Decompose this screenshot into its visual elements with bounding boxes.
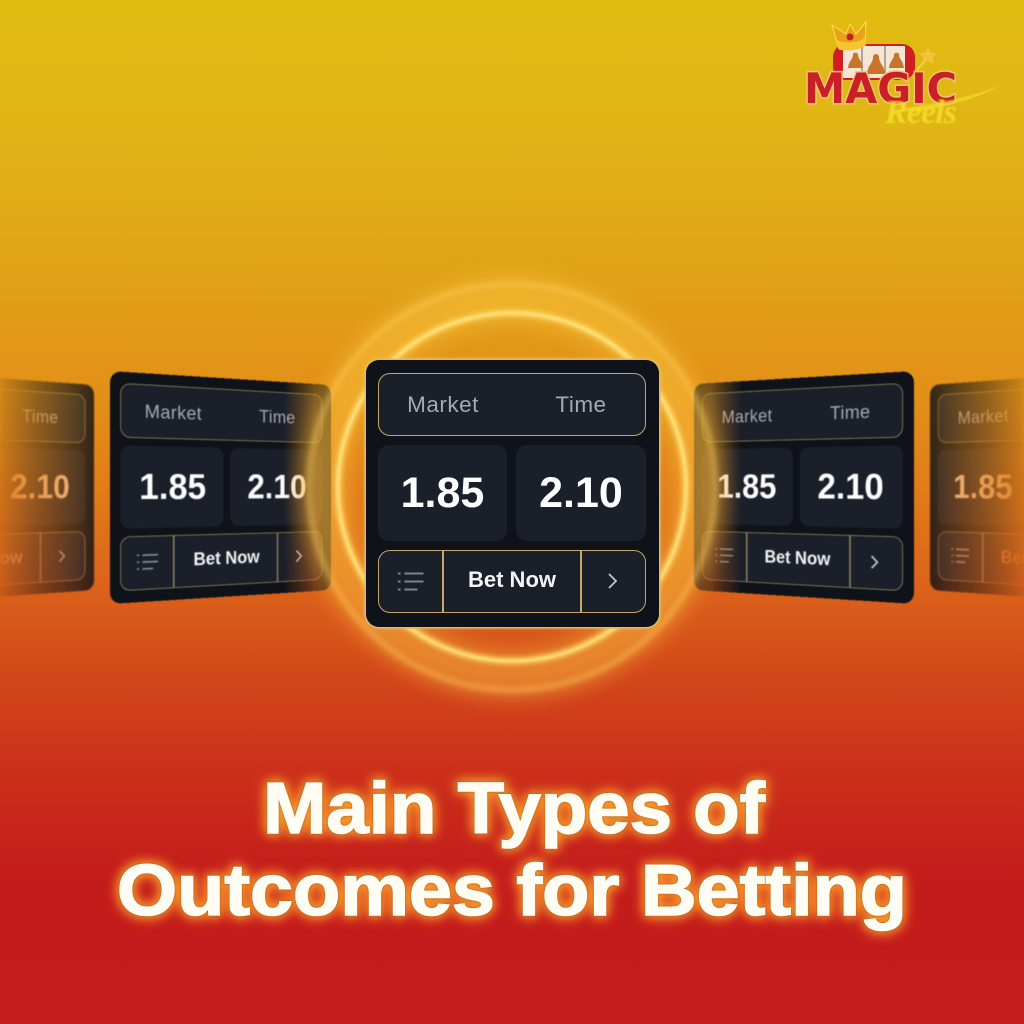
left card: Time: [259, 406, 295, 427]
right card: Time: [830, 401, 871, 424]
title: [108, 769, 914, 942]
far right card: Market: [958, 405, 1009, 428]
odds 2.10: [516, 445, 646, 541]
right card: Market: [722, 405, 772, 427]
icon: list: [398, 572, 424, 590]
icon: star wand: [915, 47, 937, 72]
odds 1.85: 1.85: [401, 469, 484, 517]
action row: [378, 550, 646, 613]
title: Outcomes for Betting: [117, 851, 907, 931]
left card: [109, 370, 332, 604]
right card: 2.10: [817, 466, 884, 508]
far left card: 2.10: [10, 468, 70, 507]
far right card: [929, 378, 1024, 597]
icon: chevron: [608, 573, 618, 589]
bet now label: Bet Now: [468, 567, 556, 592]
icon: slot reel: [833, 44, 915, 80]
far right card: 1.85: [953, 468, 1013, 507]
center card: Market: [407, 392, 479, 417]
logo: [804, 20, 996, 131]
far left card: Time: [22, 406, 58, 427]
right card: Bet Now: [765, 546, 830, 569]
center card: Time: [555, 392, 607, 417]
logo script: [884, 85, 1000, 131]
left card: Market: [145, 401, 202, 424]
odds 1.85: [378, 445, 507, 541]
right card: 1.85: [717, 467, 776, 506]
odds 2.10: 2.10: [539, 469, 623, 517]
left card: 2.10: [247, 468, 307, 506]
market header: [378, 373, 646, 436]
center card: [366, 360, 659, 627]
far left card: [0, 378, 95, 597]
right card: [694, 370, 915, 604]
left card: Bet Now: [193, 546, 260, 570]
left card: 1.85: [139, 466, 206, 508]
icon: crown: [832, 22, 866, 50]
title: Main Types of: [263, 769, 766, 849]
glowing rings: [288, 276, 736, 708]
logo wordmark: MAGIC: [804, 64, 957, 113]
logo script: Reels: [884, 94, 957, 131]
